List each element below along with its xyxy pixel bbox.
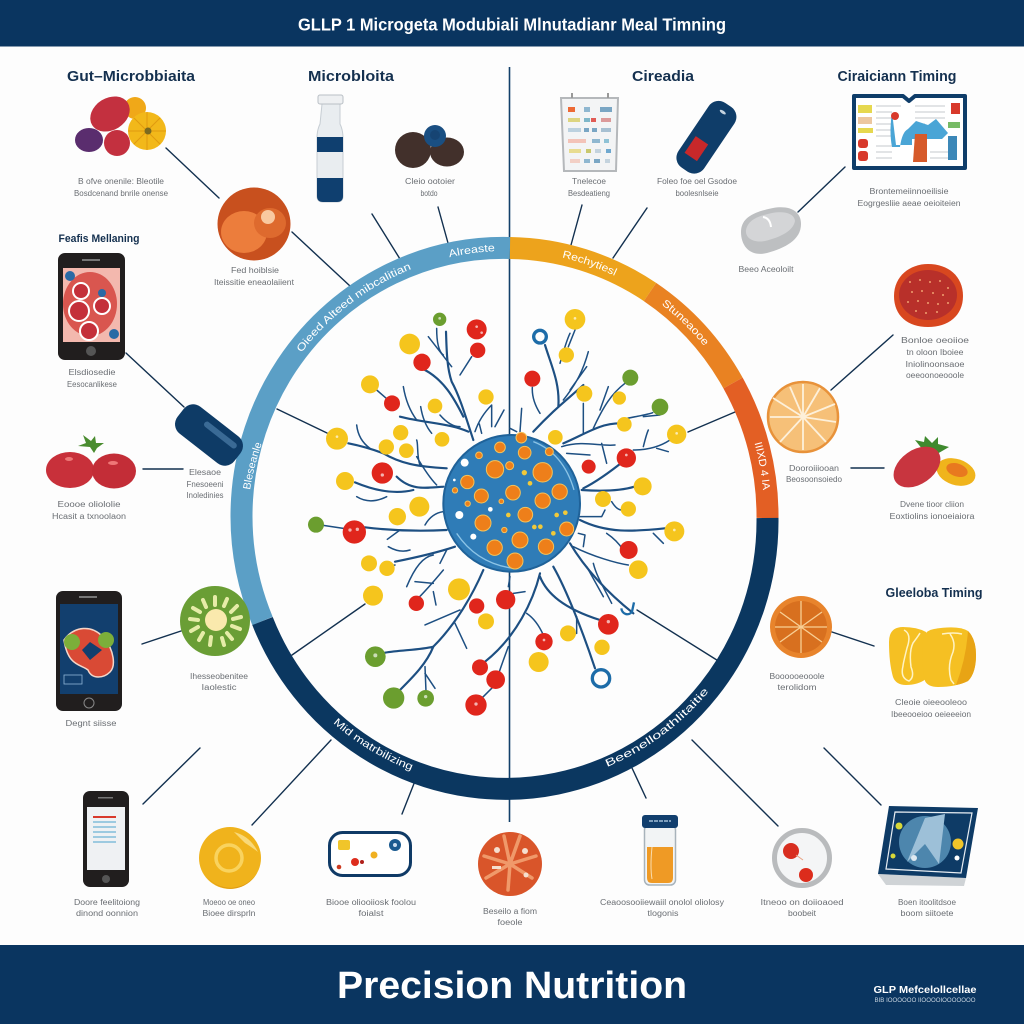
caption: mango: Dvene tioor cliion	[900, 500, 964, 509]
caption: capsule: Inoledinies	[186, 491, 224, 500]
caption: jar: Ceaoosooiiewaiil onolol oliolosy	[600, 898, 724, 907]
caption: mango: Eoxtiolins ionoeiaiora	[890, 512, 975, 521]
icon: phone with organ image	[56, 591, 122, 711]
red synapse nodes	[343, 319, 638, 716]
icon: grey pill	[741, 207, 801, 254]
caption: orange slice	[786, 464, 843, 484]
heading: Gut-Microbbiaita: Gut–Microbbiaita	[67, 69, 196, 85]
blue ring nodes	[534, 330, 634, 687]
caption: capsule: Fnesoeeni	[186, 480, 224, 489]
caption: citrus: terolidom	[778, 683, 817, 692]
icon: yellow disc	[199, 827, 261, 889]
ring label: bottom right: Beenelloathlitaitie	[605, 689, 708, 766]
heading: Gleeloba Timing: Gleeloba Timing	[886, 586, 982, 600]
caption: small phone: dinond oonnion	[76, 909, 138, 918]
icon: small phone	[83, 791, 129, 887]
caption: petri dish: boobeit	[788, 909, 817, 918]
icon: blood sample card	[330, 832, 410, 876]
icon: navy capsule top	[672, 96, 741, 178]
caption: orange food	[214, 266, 295, 287]
caption: capsule	[186, 468, 224, 500]
caption: clipboard: Besdeatieng	[568, 189, 610, 198]
ring label: bottom left: Mid matrbilizing	[334, 718, 413, 772]
heading: Cireadia: Cireadia	[632, 69, 695, 85]
ring segment: light blue	[242, 248, 510, 621]
caption: berries: Cleio ootoier	[405, 177, 455, 186]
caption: phone 1: Elsdiosedie	[68, 368, 116, 377]
ring segment: red orange	[733, 383, 768, 518]
caption: capsule top	[657, 177, 738, 198]
caption: capsule: Elesaoe	[189, 468, 222, 477]
connector lines	[126, 148, 893, 826]
ring label: top: Alreaste	[449, 245, 494, 258]
title: GLLP 1 Microgeta Modubiali Mlnutadianr Meal Timning	[298, 14, 726, 34]
caption: red food	[901, 336, 970, 380]
heading: Feafis Mellaning: Feafis Mellaning	[58, 233, 140, 245]
dendrite branches	[323, 328, 670, 698]
icon: jar	[642, 815, 678, 885]
caption: berries	[405, 177, 455, 198]
caption: tomatoes: Hcasit a txnoolaon	[52, 512, 126, 521]
caption: small phone: Doore feelitoiong	[74, 898, 140, 907]
ring label: upper left: Oieed Alteed mibcalitian	[298, 264, 411, 351]
caption: blood sample card: Biooe oliooiiosk foolou	[326, 898, 416, 907]
caption: tablet	[898, 898, 957, 918]
icon: orange slice	[768, 382, 838, 452]
caption: orange food: Iteissitie eneaolaiient	[214, 278, 295, 287]
caption: small phone	[74, 898, 140, 918]
icon: tablet	[878, 806, 978, 886]
caption: sliced red fruit: foeole	[498, 918, 523, 927]
ring label: left: Bleseanle	[243, 442, 262, 490]
caption: blood sample card	[326, 898, 416, 918]
header band	[0, 0, 1024, 46]
caption: red food: Bonloe oeoiioe	[901, 336, 970, 345]
icon: sliced red fruit	[478, 832, 542, 896]
icon: mixed fruits	[75, 89, 166, 156]
caption: tomatoes: Eoooe oliololie	[58, 500, 121, 509]
icon: navy capsule left	[170, 399, 248, 471]
caption: tablet: Boen itoolitdsoe	[898, 898, 957, 907]
vertical divider line	[508, 67, 510, 822]
caption: yellow disc	[202, 898, 256, 918]
footer note	[874, 985, 977, 1004]
caption: kiwi: Ihesseobenitee	[190, 672, 249, 681]
caption: grey pill: Beeo Aceoloilt	[738, 265, 794, 274]
ring segment: navy	[262, 518, 768, 789]
icon: red textured food	[894, 264, 963, 327]
caption: yellow disc: Bioee dirsprln	[202, 909, 256, 918]
icon: tomatoes	[46, 435, 136, 488]
green synapse nodes	[308, 313, 668, 709]
caption: red food: Iniolinoonsaoe	[906, 360, 965, 369]
caption: fruits	[74, 177, 169, 198]
caption: citrus: Boooooeooole	[770, 672, 825, 681]
segmented ring	[242, 248, 768, 789]
ring segment: gold	[510, 248, 650, 292]
caption: berries: botdo	[420, 189, 438, 198]
caption: yellow disc: Moeoo oe oneo	[203, 898, 256, 907]
caption: tomatoes	[52, 500, 126, 521]
caption: red food: oeeoonoeooole	[906, 371, 965, 380]
caption: fruits: B ofve onenile: Bleotile	[78, 177, 165, 186]
caption: fruits: Bosdcenand bnrile onense	[74, 189, 169, 198]
caption: phone 1: Eesocanlikese	[67, 380, 118, 389]
caption: capsule top: boolesnlseie	[676, 189, 719, 198]
caption: orange food: Fed hoiblsie	[231, 266, 280, 275]
icon: open book chart	[854, 96, 965, 168]
caption: open book: Eogrgesliie aeae oeioiteien	[858, 199, 960, 208]
heading: Microbloita: Microbloita	[308, 69, 395, 85]
caption: phone 2: Degnt siisse	[66, 719, 117, 728]
heading: Ciraiciann Timing: Ciraiciann Timing	[838, 69, 956, 85]
icon: berries	[395, 125, 464, 168]
icon: orange food circle	[218, 188, 290, 260]
icon: kiwi	[180, 586, 250, 656]
icon: yellow pepper	[889, 627, 976, 687]
caption: clipboard: Tnelecoe	[572, 177, 607, 186]
footer note: BIB IOOOOOO IIOOOOIOOOOOOO	[874, 998, 976, 1004]
caption: petri dish	[760, 898, 844, 918]
caption: clipboard	[568, 177, 610, 198]
caption: blood sample card: foialst	[358, 909, 384, 918]
icon: petri dish	[774, 830, 830, 886]
caption: orange slice: Beosoonsoiedo	[786, 475, 843, 484]
caption: pepper: Ibeeooeioo oeieeeion	[891, 710, 971, 719]
ring label: right upper: Stuneaooe	[662, 300, 708, 345]
caption: mango	[890, 500, 975, 521]
ring segment: orange	[650, 292, 733, 383]
caption: sliced red fruit	[483, 907, 537, 927]
footer note: GLP Mefcelollcellae	[874, 985, 977, 996]
ring label: right: IIIXD 4 IA	[754, 442, 770, 490]
caption: sliced red fruit: Beseilo a fiom	[483, 907, 537, 916]
icon: clipboard schedule	[561, 93, 618, 171]
caption: jar: tlogonis	[648, 909, 678, 918]
caption: kiwi: Iaolestic	[202, 683, 236, 692]
caption: kiwi	[190, 672, 249, 692]
caption: red food: tn oloon Iboiee	[906, 348, 964, 357]
yellow synapse nodes	[326, 309, 686, 672]
caption: phone 1	[67, 368, 118, 389]
caption: open book: Brontemeiinnoeilisie	[870, 187, 949, 196]
caption: tablet: boom siitoete	[900, 909, 954, 918]
caption: open book	[858, 187, 960, 208]
central neuron network	[308, 309, 686, 716]
caption: petri dish: Itneoo on doiioaoed	[760, 898, 844, 907]
caption: capsule top: Foleo foe oel Gsodoe	[657, 177, 738, 186]
cell body	[443, 432, 580, 572]
icon: phone with tissue image	[58, 253, 125, 360]
node highlights	[336, 317, 678, 706]
icon: mango	[886, 436, 979, 496]
caption: citrus	[770, 672, 825, 692]
ring label: top right: Rechytiesl	[563, 250, 618, 276]
caption: pepper: Cleoie oieeooleoo	[895, 698, 968, 707]
caption: pepper	[891, 698, 971, 719]
icon: citrus disc	[770, 596, 832, 658]
icon: bottle	[317, 95, 343, 202]
caption: jar	[600, 898, 724, 918]
footer title: Precision Nutrition	[337, 965, 687, 1007]
caption: orange slice: Dooroiiiooan	[789, 464, 839, 473]
footer band	[0, 945, 1024, 1024]
